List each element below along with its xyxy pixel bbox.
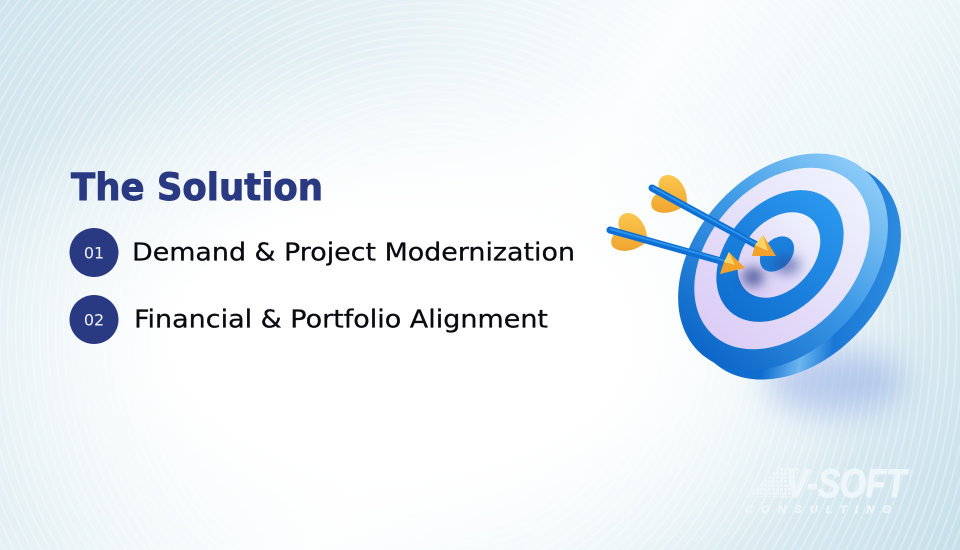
list item 02 — [70, 295, 548, 344]
icon: target with arrows — [610, 112, 943, 421]
logo: V-Soft Consulting: ® — [908, 468, 914, 477]
logo dots — [745, 468, 800, 497]
list item 02: Financial & Portfolio Alignment — [134, 304, 548, 334]
logo: V-Soft Consulting — [745, 462, 914, 516]
logo: V-Soft Consulting: V-SOFT — [786, 462, 909, 506]
list item 01 — [70, 228, 575, 277]
arrow lower — [610, 213, 745, 274]
arrow upper — [651, 175, 776, 256]
target board — [636, 112, 943, 421]
list item 01: 01 — [84, 244, 104, 262]
list item 01: Demand & Project Modernization — [132, 238, 575, 266]
logo: V-Soft Consulting: CONSULTING — [745, 504, 891, 516]
list item 02: 02 — [84, 310, 104, 330]
title: The Solution — [71, 166, 323, 209]
target shadow — [765, 350, 905, 414]
